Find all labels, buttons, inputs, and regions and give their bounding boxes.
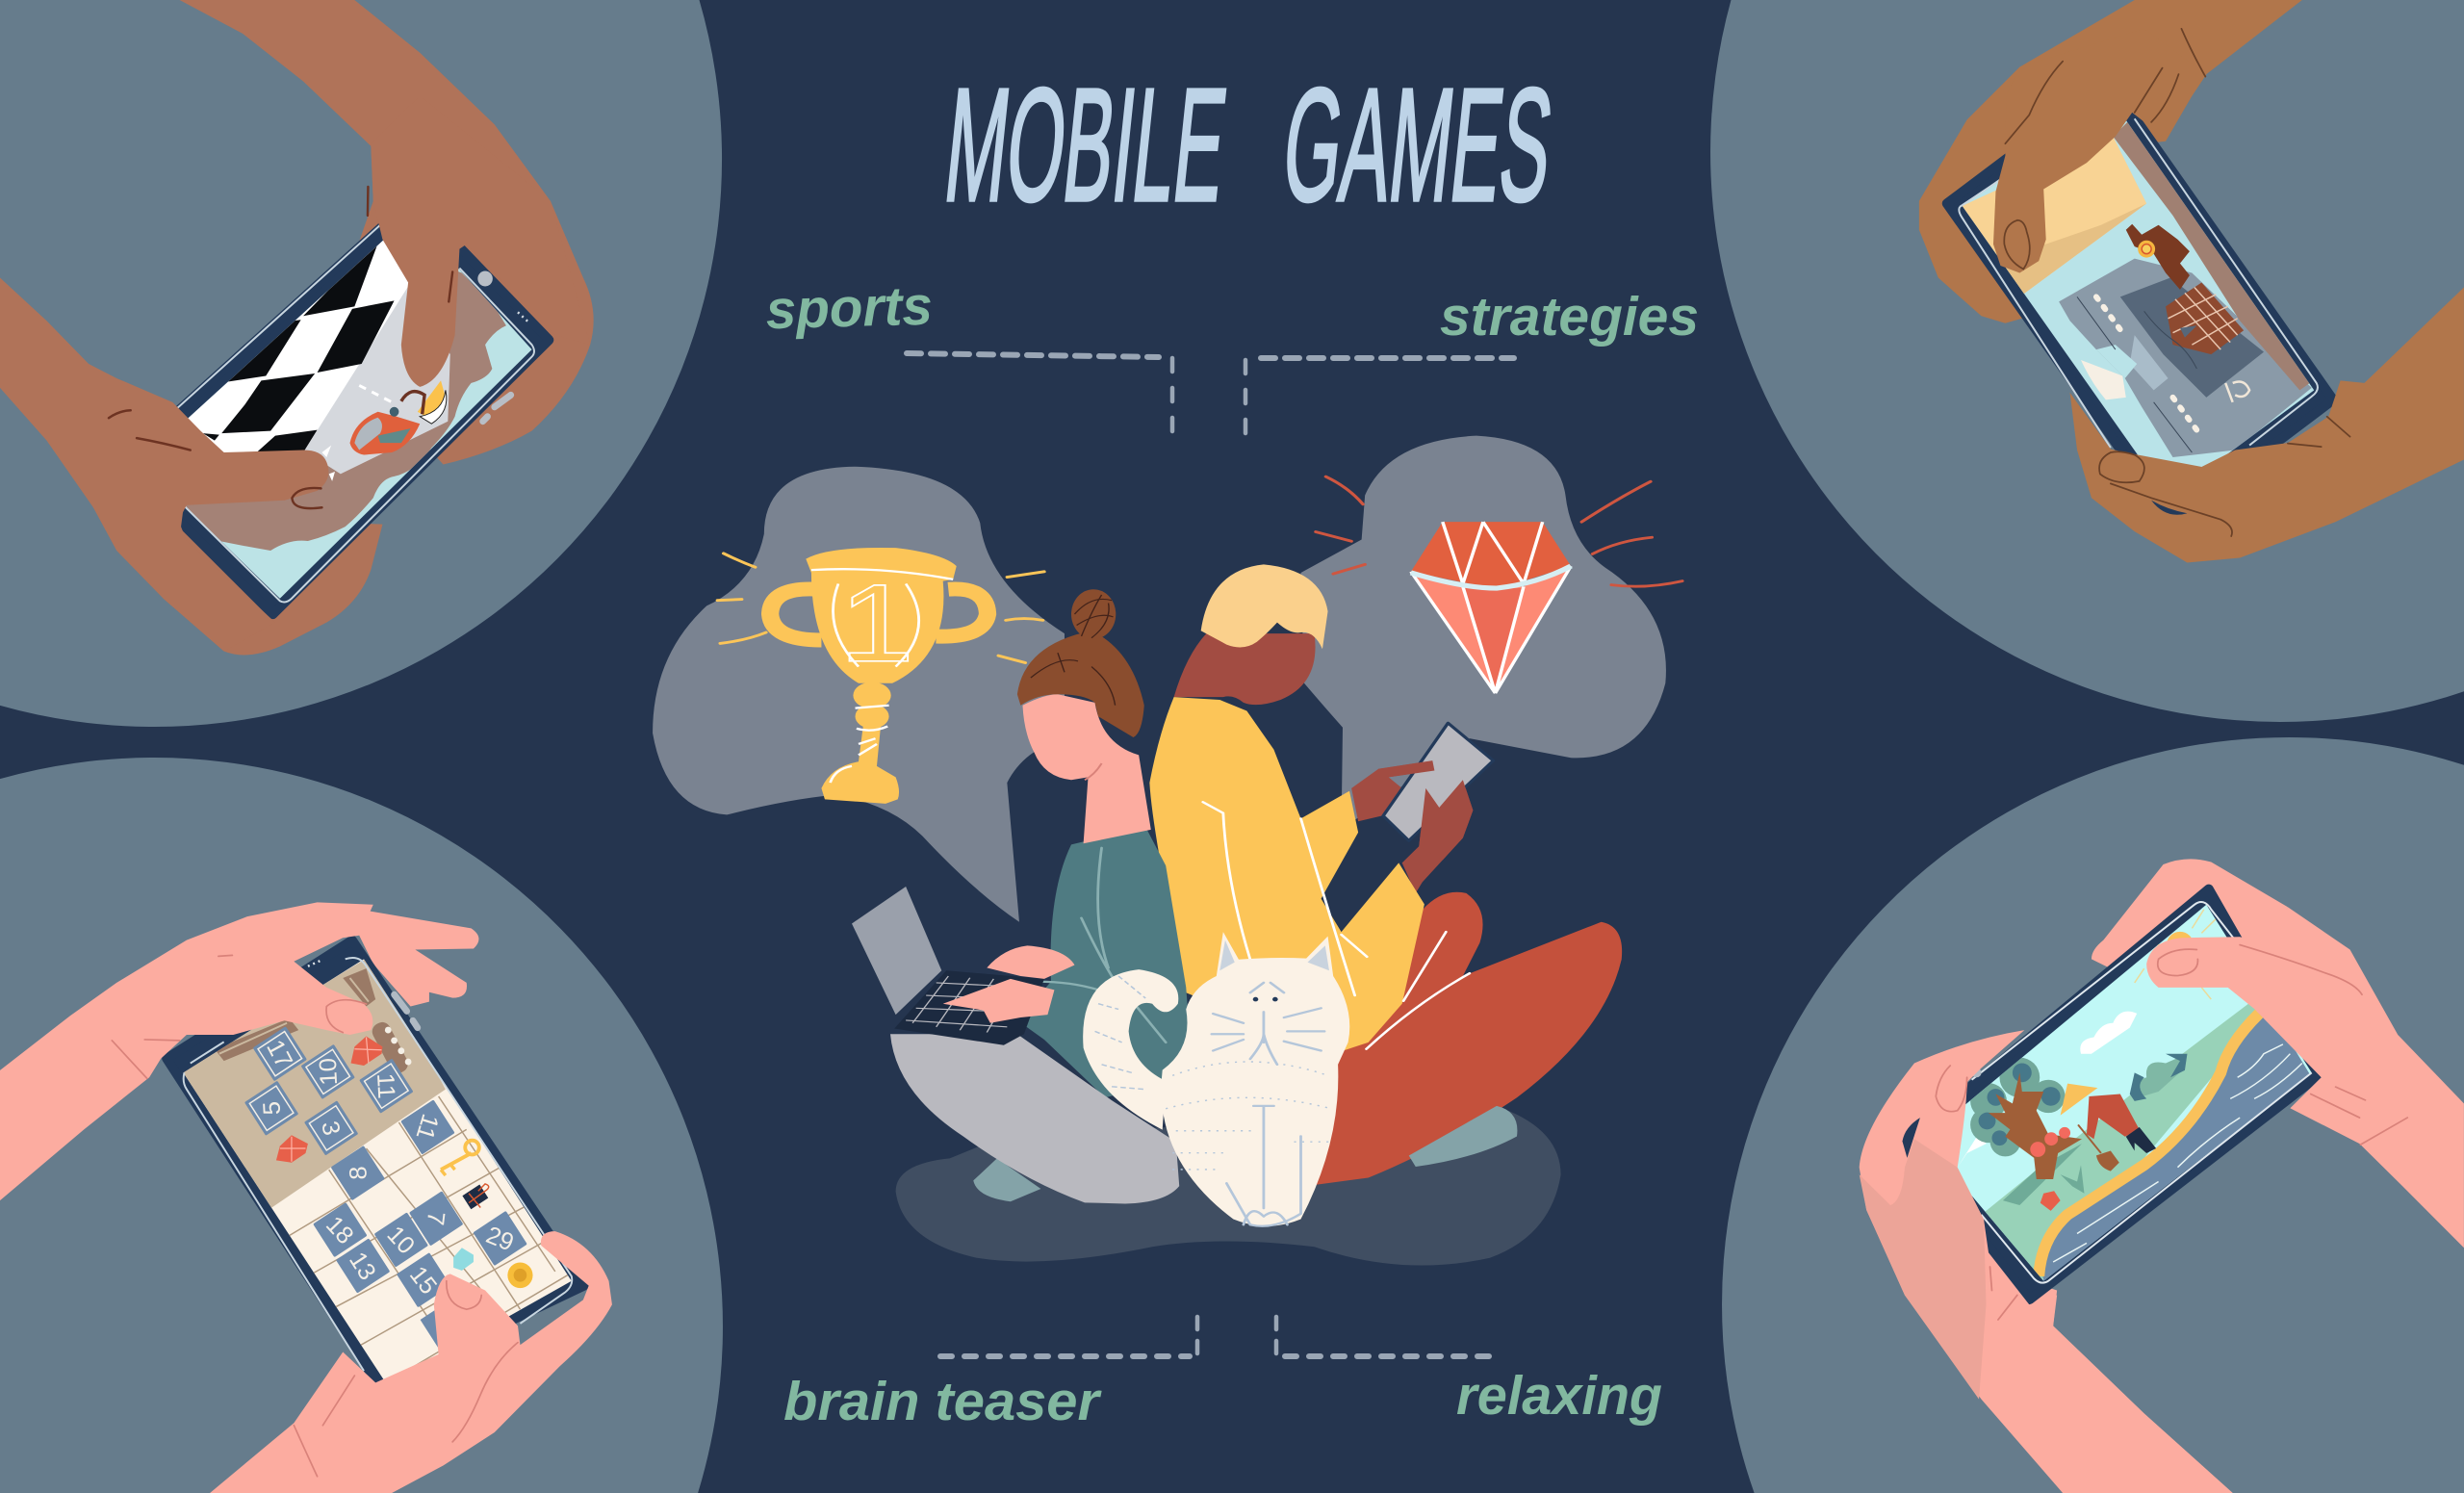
left hand and arm — [1860, 1030, 2233, 1493]
man: sweater — [1149, 697, 1424, 1053]
man: arm holding phone — [1351, 760, 1473, 893]
man: pants — [1315, 892, 1622, 1185]
label: sports: sports — [765, 275, 934, 341]
woman: neck and face — [1022, 694, 1151, 843]
hand behind phone — [1919, 0, 2302, 323]
side buttons — [395, 994, 418, 1028]
label: strategies: strategies — [1440, 286, 1699, 348]
cup — [806, 548, 957, 683]
handles — [770, 589, 988, 640]
phone edge behind thumb — [1902, 1118, 1920, 1158]
fingers behind phone — [2092, 859, 2288, 973]
woman: near foot — [973, 1158, 1040, 1201]
skin lines — [109, 187, 452, 508]
central illustration: two people and cat — [653, 436, 1682, 1266]
phone outline — [184, 958, 572, 1371]
woman: pants — [890, 1034, 1179, 1203]
cat — [1083, 932, 1349, 1226]
phone screen: 17 — [261, 1036, 297, 1072]
phone outline — [140, 225, 534, 603]
tree canopy — [1999, 1058, 2040, 1097]
tail — [1083, 969, 1178, 1130]
phone screen: 3 — [316, 1119, 345, 1138]
man: far foot — [1409, 1106, 1517, 1167]
connector: sports — [907, 353, 1159, 357]
phone body — [1947, 82, 2333, 522]
connector: sports vertical — [1170, 358, 1174, 440]
trophy numeral: 1 — [839, 562, 914, 685]
left hand shading — [1860, 1139, 1987, 1400]
gem — [2040, 1191, 2061, 1211]
circle panel: top right — [1710, 0, 2464, 722]
hand lines — [2004, 29, 2350, 536]
upper thumb and hand — [1993, 29, 2206, 273]
lower hand — [210, 1231, 612, 1493]
phone scene: bottom left number puzzle — [0, 902, 612, 1493]
bush — [2140, 1059, 2180, 1095]
phone screen: 13 — [344, 1248, 381, 1285]
phone screen: 10 — [315, 1057, 343, 1086]
woman: hair — [1017, 631, 1144, 737]
phone screen — [1963, 121, 2314, 467]
circle panel: bottom left — [0, 758, 723, 1493]
ground shadow — [2003, 1144, 2082, 1205]
phone body — [1907, 889, 2317, 1300]
man: thumb over phone — [1419, 780, 1473, 860]
sun — [2168, 932, 2192, 941]
tree trunk — [1989, 1072, 2082, 1179]
title: MOBILE — [937, 55, 1234, 235]
circle panel: bottom right — [1722, 737, 2464, 1493]
man: neck and head — [1174, 633, 1316, 705]
thought bubble: trophy — [653, 467, 1065, 922]
connector: strategies vertical — [1244, 360, 1247, 436]
label: brain teaser: brain teaser — [783, 1371, 1102, 1432]
upper hand and arm — [0, 902, 373, 1200]
circle panel: top left — [0, 0, 722, 727]
laptop screen — [852, 887, 941, 1015]
text: GAMES — [1275, 55, 1560, 235]
woman: sweater — [1017, 827, 1193, 1097]
phone outline — [1959, 118, 2318, 448]
connector: relaxing vertical — [1274, 1317, 1278, 1353]
right hand and thumb — [2146, 907, 2464, 1248]
phone screen: 11 — [411, 1111, 444, 1143]
pointing finger — [371, 95, 590, 387]
gardener — [2087, 1094, 2140, 1139]
phone screen: 7 — [422, 1210, 449, 1226]
connector: brain teaser vertical — [1195, 1317, 1199, 1353]
phone screen — [1924, 905, 2312, 1283]
skin lines — [112, 955, 518, 1477]
cloud — [2080, 1012, 2137, 1054]
phone scene: bottom right farming game — [1860, 859, 2464, 1493]
laptop keyboard — [894, 970, 1044, 1045]
arm behind phone — [2000, 1272, 2233, 1493]
skin lines — [1936, 945, 2407, 1320]
smartphone — [1383, 723, 1493, 840]
phone screen: 29 — [482, 1222, 518, 1257]
connector: strategies — [1261, 355, 1514, 361]
diamond — [1316, 476, 1682, 693]
camera dots — [308, 960, 321, 966]
red sparkle lines — [1316, 476, 1682, 586]
phone body — [167, 940, 584, 1384]
fingers behind phone — [346, 907, 478, 1007]
phone screen: 15 — [404, 1261, 442, 1300]
body — [1162, 932, 1349, 1226]
phone scene: top left racing game — [0, 0, 594, 655]
man: hair — [1201, 564, 1328, 649]
camera — [1972, 1068, 1982, 1077]
thought bubble: diamond — [1301, 436, 1666, 830]
race car — [321, 380, 447, 481]
woman: hands — [943, 945, 1074, 1023]
speaker dots — [518, 312, 528, 322]
phone screen — [177, 954, 574, 1385]
sparkle lines — [717, 553, 1044, 663]
side buttons — [483, 395, 511, 422]
phone screen: 18 — [321, 1211, 358, 1249]
fur strokes — [1166, 1062, 1331, 1170]
body lines — [1212, 983, 1324, 1226]
ground shadow — [896, 1109, 1561, 1266]
hand and thumb in front of phone — [0, 277, 328, 651]
phone scene: top right castle game — [1919, 0, 2464, 562]
phone screen — [186, 241, 531, 599]
phone screen: 5 — [259, 1100, 286, 1116]
man: leg highlight — [1367, 932, 1470, 1049]
phone body — [121, 198, 549, 614]
connector: relaxing — [1285, 1353, 1489, 1359]
phone outline — [1972, 902, 2312, 1283]
phone screen: 11 — [372, 1072, 399, 1099]
trophy — [717, 548, 1044, 804]
connector: brain teaser — [940, 1353, 1190, 1359]
label: relaxing: relaxing — [1456, 1365, 1662, 1427]
lower hand — [2070, 287, 2464, 562]
stem and base — [853, 682, 891, 708]
phone screen: 10 — [382, 1221, 420, 1259]
hands behind phone — [180, 0, 594, 464]
phone screen: 8 — [345, 1166, 372, 1180]
fingernail shadow — [2151, 501, 2187, 515]
phone camera — [477, 271, 493, 286]
